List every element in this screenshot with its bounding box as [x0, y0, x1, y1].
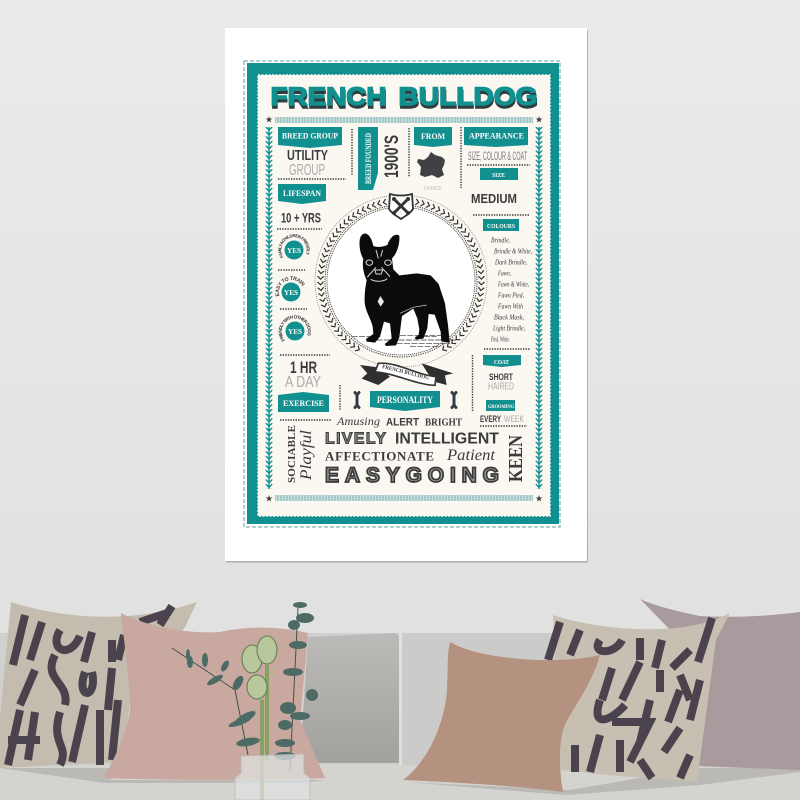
icon: right bone	[452, 392, 456, 408]
word cloud: Playful	[298, 429, 315, 481]
eucalyptus leaves	[186, 602, 318, 760]
panel: coat: SHORT	[489, 372, 513, 383]
word cloud: Amusing	[336, 414, 380, 428]
panel: size	[471, 168, 518, 206]
word cloud: ALERT	[386, 416, 419, 428]
ribbon label: FRENCH BULLDOG	[382, 364, 430, 382]
outer dotted ring	[315, 195, 487, 367]
plant and vase	[172, 602, 318, 800]
panel: size: SIZE	[492, 172, 505, 179]
colour list: Brindle,	[491, 236, 510, 244]
colour list: Brindle & White,	[494, 246, 532, 256]
panel: lifespan	[278, 184, 326, 226]
personality banner: PERSONALITY	[377, 395, 433, 405]
badge: easy to train: EASY TO TRAIN	[275, 276, 305, 296]
glass vase	[235, 754, 310, 800]
colour list: Fawn,	[497, 268, 511, 278]
badge: friendly with other dogs: FRIENDLY WITH OTHER DOGS	[278, 315, 311, 342]
badge: family and children friendly: YES	[287, 246, 301, 255]
stars: ★	[535, 494, 543, 504]
panel: exercise: 1 HR	[290, 358, 317, 377]
panel: breed group: UTILITY	[287, 147, 328, 164]
panel: colours: COLOURS	[487, 223, 515, 230]
teal frame	[247, 63, 559, 524]
stars	[265, 116, 543, 504]
personality banner	[370, 391, 440, 411]
colour list: Pied, White.	[490, 334, 510, 344]
outer dashed border	[244, 61, 560, 527]
word cloud: SOCIABLE	[286, 425, 298, 483]
panel: from: FRANCE	[424, 186, 443, 192]
pink pillow left	[103, 613, 325, 780]
title: BULLDOG	[398, 83, 538, 111]
panel: breed group	[278, 127, 342, 179]
canvas print: SIZE, COLOUR & COAT	[468, 149, 527, 163]
panel: coat: COAT	[494, 359, 510, 366]
shield emblem	[389, 194, 413, 219]
bottom stripe	[275, 495, 533, 501]
laurel wreath	[317, 199, 485, 352]
panel: colours	[483, 219, 532, 344]
colour list: Fawn & White,	[497, 280, 529, 288]
panel: grooming: WEEK	[504, 414, 524, 424]
mauve pillow	[640, 599, 800, 770]
word cloud: LIVELY	[325, 430, 386, 448]
face markings	[366, 250, 391, 281]
cream panel	[258, 75, 550, 516]
panel: size: MEDIUM	[471, 191, 517, 206]
left chevron column	[264, 127, 274, 489]
panel: coat: HAIRED	[488, 382, 514, 392]
panel: exercise: A DAY	[285, 374, 321, 391]
panel: breed group: GROUP	[289, 162, 325, 179]
panel: appearance: APPEARANCE	[469, 132, 524, 140]
word cloud: INTELLIGENT	[395, 430, 499, 448]
pink pillow right	[403, 642, 600, 792]
panel: grooming: GROOMING	[488, 404, 515, 410]
title: BULLDOG	[399, 86, 538, 114]
panel: from: FROM	[421, 131, 445, 141]
word cloud: KEEN	[505, 435, 527, 482]
word cloud: BRIGHT	[425, 416, 463, 428]
colour list: Dark Brindle,	[494, 258, 527, 266]
panel: lifespan: LIFESPAN	[283, 188, 322, 198]
panel: breed group: BREED GROUP	[282, 130, 338, 140]
panel: exercise	[278, 358, 329, 412]
sofa	[0, 633, 800, 800]
title: FRENCH	[270, 83, 386, 111]
colour list: Black Mask,	[494, 312, 524, 322]
badge: family and children friendly: FAMILY&CHILDREN FRIENDLY	[278, 234, 310, 258]
patterned pillow right	[548, 613, 730, 782]
colour list: Fawn Pied,	[497, 290, 524, 300]
word cloud	[286, 414, 527, 487]
stars: ★	[535, 116, 543, 126]
icon: map of France	[417, 152, 445, 178]
panel: breed founded: BREED FOUNDED	[364, 133, 373, 184]
stars: ★	[265, 116, 273, 126]
panel: exercise: EXERCISE	[283, 398, 324, 408]
panel: grooming: EVERY	[480, 414, 501, 424]
title: FRENCH	[271, 86, 387, 114]
colour list	[490, 236, 532, 344]
badge: easy to train: YES	[284, 288, 298, 297]
right chevron column	[534, 127, 544, 489]
icon: left bone	[355, 392, 359, 408]
panel: breed founded: 1900'S	[382, 135, 403, 178]
title	[270, 83, 538, 114]
word cloud: EASYGOING	[325, 464, 499, 487]
badge: friendly with other dogs: YES	[288, 327, 302, 336]
word cloud: AFFECTIONATE	[325, 448, 434, 464]
ribbon banner	[360, 363, 453, 385]
panel: coat	[483, 355, 521, 392]
patterned pillow left	[0, 602, 197, 768]
artichoke stems	[262, 665, 267, 800]
top stripe	[275, 117, 533, 123]
dog silhouette	[360, 233, 450, 346]
panel: grooming	[480, 400, 524, 424]
artichoke buds	[242, 636, 277, 699]
colour list: Fawn With	[497, 302, 523, 310]
panel: breed founded	[358, 127, 403, 190]
panel: appearance	[464, 127, 528, 163]
dog illustration	[352, 233, 457, 347]
stars: ★	[265, 494, 273, 504]
branches	[172, 608, 298, 770]
sofa seat	[0, 765, 800, 800]
ground	[352, 335, 457, 347]
panel: lifespan: 10 + YRS	[281, 210, 321, 226]
medallion	[315, 195, 487, 367]
sofa back cushions	[0, 633, 399, 765]
colour list: Light Brindle,	[492, 324, 525, 332]
word cloud: Patient	[446, 447, 496, 464]
canvas print	[225, 28, 588, 562]
panel: from	[414, 127, 452, 192]
